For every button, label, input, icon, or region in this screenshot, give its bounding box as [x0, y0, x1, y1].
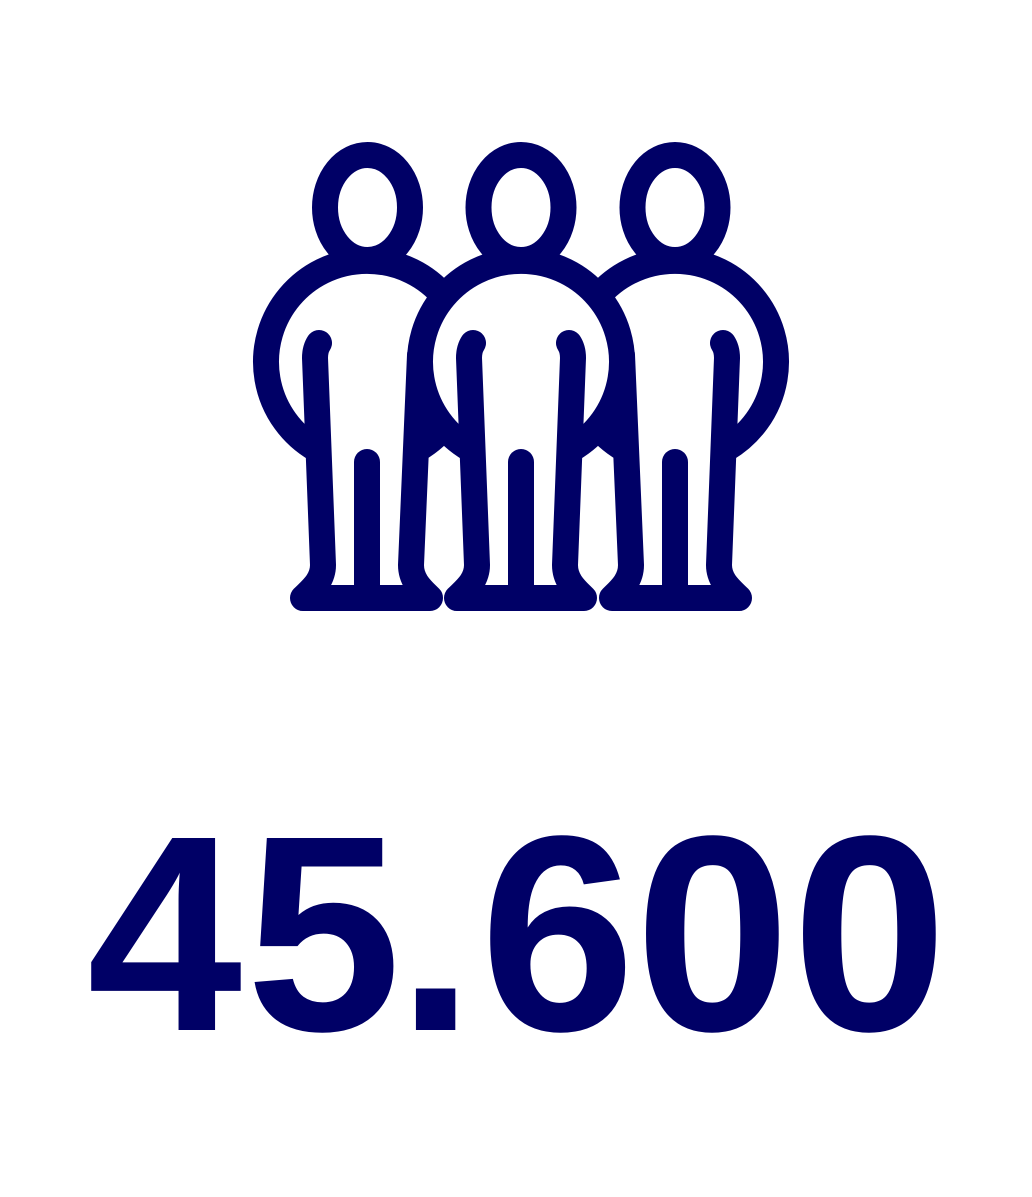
icon: three people [266, 155, 776, 598]
big number: 45.600 [87, 778, 947, 1090]
icon: middle person [420, 155, 622, 598]
icon: right person [574, 155, 776, 598]
icon: left person [266, 155, 468, 598]
